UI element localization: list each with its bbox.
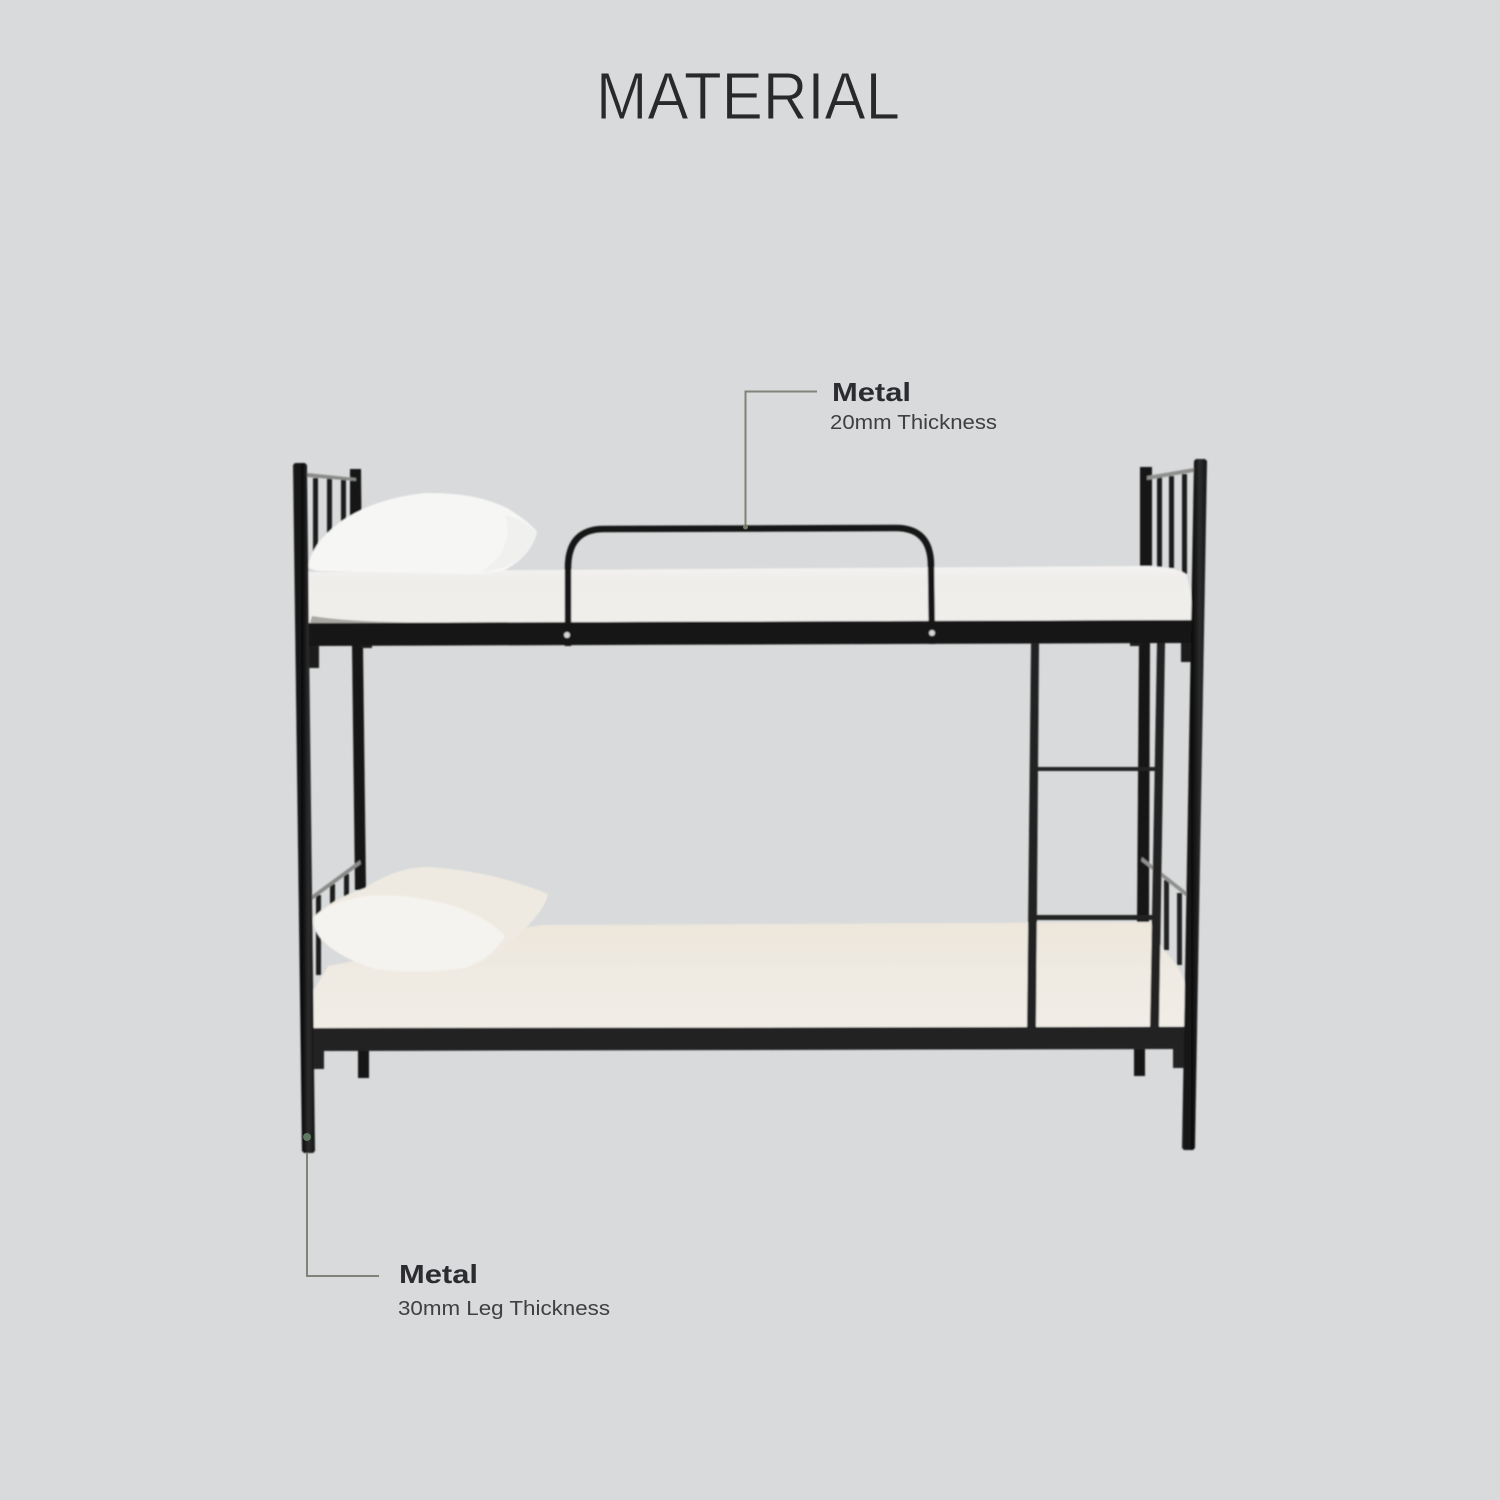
leader dot top (743, 524, 748, 530)
lower right headboard rail (1141, 857, 1188, 897)
label heading top: Metal (832, 377, 911, 407)
upper brackets (307, 643, 1194, 668)
rear posts and legs (350, 467, 1152, 1078)
label detail top: 20mm Thickness (830, 412, 997, 434)
upper pillow (309, 493, 537, 574)
lower left headboard slats (316, 874, 349, 975)
guard rail bolts (564, 630, 935, 638)
left front post (293, 463, 315, 1153)
upper mattress wrinkles (310, 616, 410, 623)
callout: 20mm metal (743, 377, 997, 530)
leader dot bottom (303, 1133, 311, 1141)
bunk bed (293, 459, 1207, 1153)
upper right headboard rail (1147, 468, 1194, 480)
callout: 30mm leg (303, 1133, 610, 1320)
upper side beam (308, 620, 1193, 646)
lower right headboard (1164, 880, 1182, 965)
upper right headboard slats (1157, 474, 1187, 574)
lower mattress (314, 922, 1185, 1029)
label detail bottom: 30mm Leg Thickness (398, 1298, 610, 1320)
lower pillow front (314, 895, 505, 972)
upper mattress (309, 566, 1192, 623)
upper left headboard rail (307, 473, 356, 481)
guard rail (568, 528, 932, 646)
right front post (1182, 459, 1207, 1150)
upper left headboard slats (313, 478, 346, 570)
lower pillow (314, 867, 548, 972)
label heading bottom: Metal (399, 1259, 478, 1289)
leader line top (746, 392, 817, 527)
upper pillow shade (480, 515, 536, 572)
title: MATERIAL (596, 59, 900, 134)
ladder (1027, 643, 1165, 1028)
lower side beam (311, 1027, 1186, 1051)
lower left headboard rail (311, 860, 361, 900)
lower brackets (311, 1049, 1187, 1069)
leader line bottom (307, 1153, 379, 1276)
